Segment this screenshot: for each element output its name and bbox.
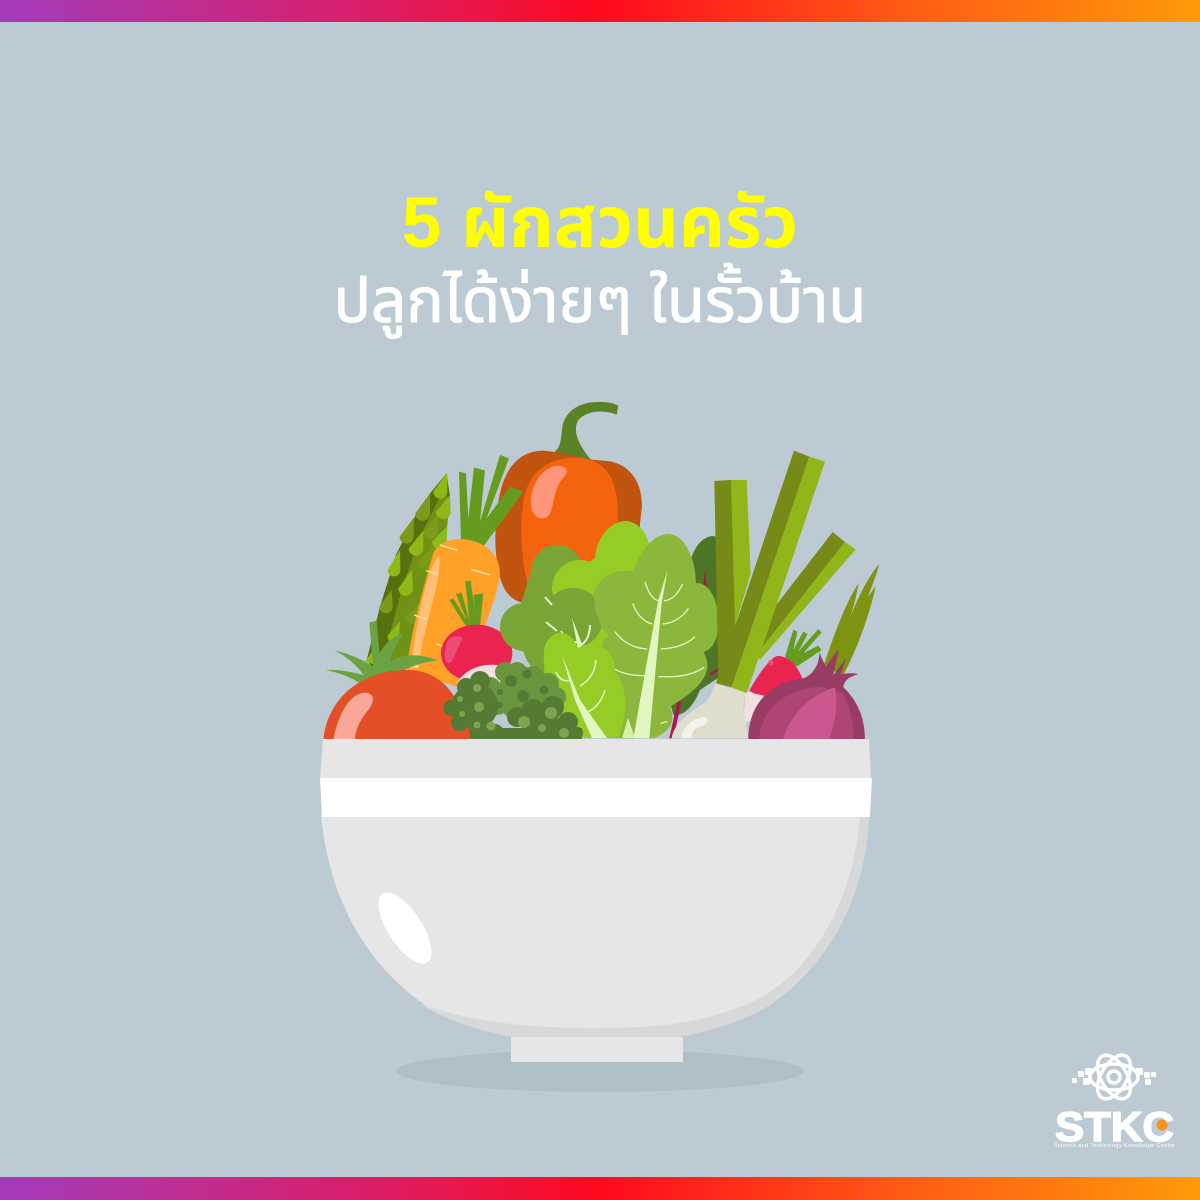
icon: chard leaf (594, 534, 718, 738)
icon: leafy green back (500, 521, 655, 720)
icon: red radish front (441, 581, 512, 683)
icon: tomato leaves (326, 621, 438, 683)
bowl body (321, 815, 869, 1044)
icon: small front leaf (544, 633, 635, 738)
bowl foot (511, 1037, 683, 1062)
icon: spring onion (672, 451, 856, 738)
logo atom symbol (1090, 1050, 1138, 1104)
icon: onion tops (823, 564, 879, 675)
bottom gradient bar (0, 1177, 1200, 1200)
icon: broccoli (443, 662, 583, 746)
subtitle: ปลูกได้ง่ายๆ ในรั้วบ้าน (334, 267, 866, 336)
icon: bell pepper (495, 402, 642, 604)
dark back leaf (667, 536, 731, 738)
icon: tomato (323, 670, 473, 740)
logo wordmark: STKC (1055, 1103, 1174, 1150)
icon: asparagus (365, 473, 451, 673)
icon: red onion (748, 649, 865, 740)
bowl rim (320, 739, 871, 779)
top gradient bar (0, 0, 1200, 22)
bowl white band (320, 778, 872, 817)
logo dots (1072, 1068, 1156, 1085)
logo tagline: Science and Technology Knowledge Center (1054, 1143, 1175, 1149)
bowl ground shadow (396, 1050, 804, 1092)
asparagus scales (379, 493, 438, 624)
bowl highlight (368, 884, 442, 972)
icon: red radish back (743, 629, 822, 723)
bowl shape (320, 739, 872, 1062)
title: 5 ผักสวนครัว (402, 184, 798, 263)
bowl shaded edge (420, 815, 869, 1044)
logo: STKC (1054, 1050, 1175, 1150)
logo orange dot (1156, 1120, 1168, 1130)
icon: carrot (407, 455, 523, 687)
